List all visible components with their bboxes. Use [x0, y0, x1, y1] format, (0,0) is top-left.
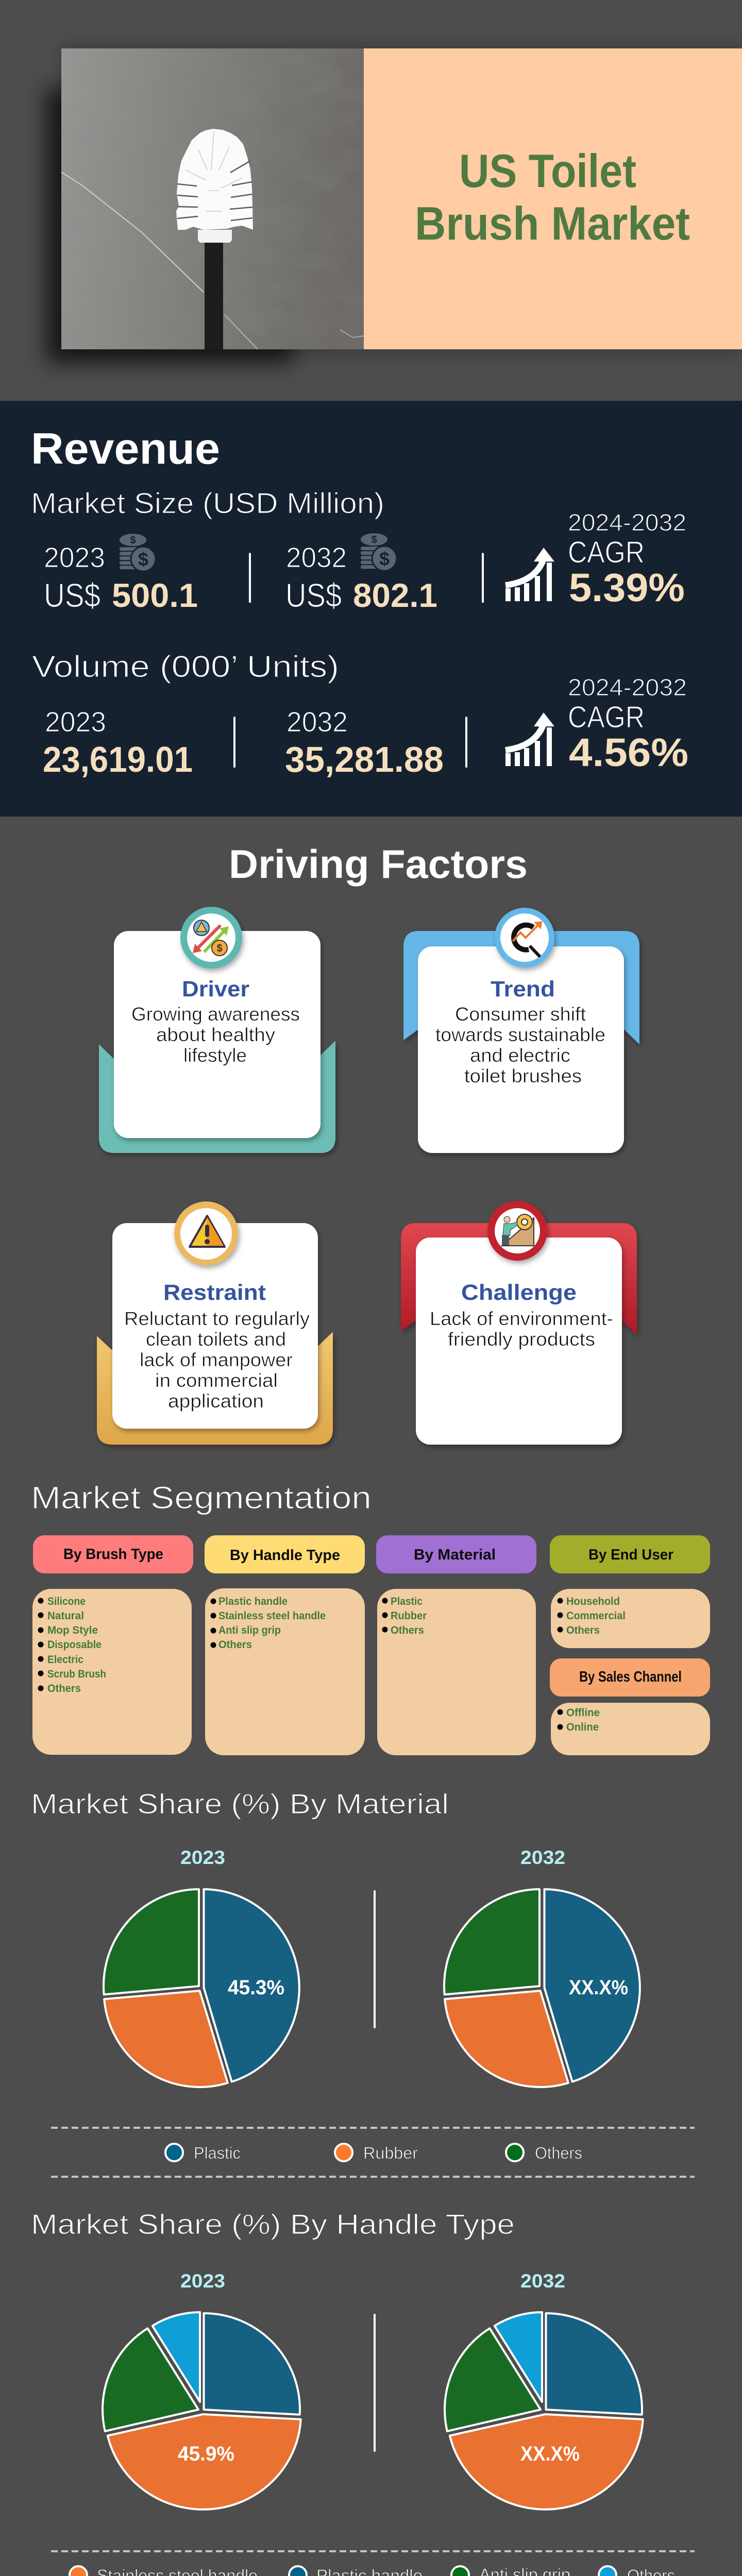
panel: driver	[99, 907, 335, 1153]
hero photo: toilet brush on stone	[61, 48, 364, 349]
list: handle types: Stainless steel handle	[218, 1610, 326, 1622]
label: challenge: Challenge	[461, 1280, 577, 1305]
stat: volume 2023: 2023	[45, 706, 106, 738]
pie: material 2032	[444, 1889, 640, 2087]
subheading: volume: Volume (000’ Units)	[32, 650, 339, 684]
list: end users: Household	[566, 1596, 620, 1607]
text: restraint description	[124, 1308, 310, 1412]
heading: driving factors: Driving Factors	[229, 841, 528, 887]
stat: volume 2032: 35,281.88	[285, 739, 444, 779]
stat: volume CAGR: 4.56%	[569, 731, 688, 775]
icon: coins 2032: $	[379, 548, 390, 569]
stat: market size 2032: US$	[285, 577, 342, 614]
stat: volume 2023: 23,619.01	[43, 739, 193, 779]
list: brush types: Others	[47, 1683, 81, 1694]
icon: growth arrow	[505, 713, 554, 766]
text: challenge description: Lack of environment-	[430, 1308, 613, 1329]
panel: revenue	[0, 401, 742, 817]
heading: market share by handle type: Market Share (%) By Handle Type	[31, 2208, 515, 2240]
list: brush types: Disposable	[47, 1639, 102, 1651]
panel: by brush type	[32, 1535, 193, 1755]
text: trend description: towards sustainable	[435, 1024, 605, 1045]
stat: market size 2023: 500.1	[112, 577, 198, 614]
text: driver description: lifestyle	[183, 1045, 247, 1066]
list: brush types: Mop Style	[47, 1624, 98, 1636]
divider	[482, 553, 484, 603]
text: challenge description	[430, 1308, 613, 1350]
label: 2032: 2032	[520, 1847, 565, 1868]
icon: trend	[495, 908, 554, 968]
label: 2032: 2032	[520, 2270, 565, 2292]
label: driver: Driver	[182, 977, 249, 1002]
title	[415, 145, 690, 250]
title: Brush Market	[415, 198, 690, 250]
panel: by end user: By End User	[588, 1547, 673, 1563]
icon: growth arrow	[505, 548, 554, 601]
stat: market size 2023: US$	[44, 577, 100, 614]
stat: market size 2023	[44, 541, 198, 614]
list: brush types: Silicone	[47, 1596, 86, 1607]
panel: by sales channel: By Sales Channel	[579, 1669, 682, 1685]
peach title panel	[364, 48, 742, 349]
label: trend: Trend	[491, 977, 555, 1002]
stat: market size 2023: 2023	[44, 541, 105, 573]
text: restraint description: Reluctant to regularly	[124, 1308, 310, 1329]
list: materials: Others	[391, 1624, 424, 1636]
icon: coins 2023: $	[138, 549, 148, 570]
panel: by sales channel	[550, 1658, 710, 1755]
heading: market segmentation: Market Segmentation	[31, 1480, 372, 1515]
chart: handle type pies	[103, 2270, 643, 2510]
list: end users	[558, 1596, 626, 1636]
list: end users: Commercial	[566, 1610, 626, 1622]
list: brush types: Scrub Brush	[47, 1668, 106, 1680]
icon: coins 2032	[361, 533, 397, 571]
text: trend description: and electric	[470, 1045, 570, 1066]
pie: material 2023	[104, 1889, 299, 2087]
text: restraint description: application	[168, 1391, 264, 1412]
list: sales channels: Offline	[566, 1707, 600, 1719]
list: sales channels	[558, 1707, 600, 1733]
stat: market size 2032: 2032	[286, 541, 347, 573]
icon: driver	[180, 907, 242, 969]
pie: handle type 2032	[445, 2312, 643, 2510]
list: brush types: Natural	[47, 1610, 84, 1622]
text: trend description: Consumer shift	[455, 1004, 586, 1025]
divider	[374, 2314, 376, 2452]
stat: value CAGR: 2024-2032	[568, 509, 686, 536]
text: trend description	[435, 1004, 605, 1087]
text: restraint description: lack of manpower	[140, 1349, 293, 1370]
stat: value CAGR	[568, 509, 686, 610]
label: restraint: Restraint	[163, 1280, 266, 1305]
stat: volume 2023	[43, 706, 193, 779]
list: brush types	[38, 1596, 106, 1694]
panel: by material	[376, 1535, 536, 1755]
stat: volume CAGR	[568, 674, 688, 775]
list: end users: Others	[566, 1624, 600, 1636]
text: trend description: toilet brushes	[464, 1065, 582, 1087]
list: handle types	[210, 1596, 326, 1651]
text: driver description	[131, 1004, 300, 1066]
value: XX.X%: XX.X%	[569, 1976, 628, 1999]
icon: coins 2023	[120, 534, 156, 571]
list: handle types: Anti slip grip	[218, 1624, 281, 1636]
stat: volume 2032	[285, 706, 444, 779]
list: materials: Plastic	[391, 1596, 423, 1607]
subheading: market size: Market Size (USD Million)	[31, 487, 384, 520]
panel: by brush type: By Brush Type	[63, 1546, 163, 1563]
title: US Toilet	[459, 145, 636, 197]
text: restraint description: in commercial	[155, 1370, 278, 1391]
icon: driver: $	[216, 943, 223, 954]
stat: market size 2032: 802.1	[353, 577, 437, 614]
chart: material pies	[104, 1847, 640, 2087]
icon: coins 2032: $	[371, 534, 377, 546]
panel: by handle type	[205, 1535, 365, 1755]
legend: material: Rubber	[363, 2144, 418, 2162]
legend: material: Others	[535, 2144, 582, 2162]
list: handle types: Plastic handle	[218, 1596, 288, 1607]
text: driver description: Growing awareness	[131, 1004, 300, 1025]
text: challenge description: friendly products	[448, 1329, 595, 1350]
value: 45.3%: 45.3%	[228, 1976, 284, 1999]
list: materials	[382, 1596, 427, 1636]
stat: market size 2032	[285, 541, 437, 614]
divider	[233, 717, 235, 768]
legend: material: Plastic	[194, 2144, 241, 2162]
heading: market share by material: Market Share (%) By Material	[31, 1788, 449, 1820]
stat: volume 2032: 2032	[286, 706, 348, 738]
hero banner	[45, 45, 742, 363]
panel: restraint	[97, 1201, 333, 1445]
text: restraint description: clean toilets and	[146, 1329, 286, 1350]
panel: by handle type: By Handle Type	[230, 1547, 340, 1564]
text: driver description: about healthy	[156, 1024, 276, 1045]
divider	[374, 1890, 376, 2028]
stat: volume CAGR: CAGR	[568, 700, 645, 734]
list: handle types: Others	[218, 1639, 252, 1651]
label: 2023: 2023	[180, 1847, 225, 1868]
icon: coins 2023: $	[130, 535, 136, 546]
pie: handle type 2023	[103, 2312, 301, 2510]
divider	[465, 717, 467, 768]
value: 45.9%: 45.9%	[178, 2443, 234, 2465]
list: materials: Rubber	[391, 1610, 427, 1622]
panel: by material: By Material	[414, 1547, 496, 1563]
label: 2023: 2023	[180, 2270, 225, 2292]
panel: challenge	[401, 1201, 637, 1445]
list: sales channels: Online	[566, 1721, 599, 1733]
value: XX.X%: XX.X%	[520, 2443, 580, 2465]
divider	[249, 553, 251, 603]
panel: trend	[403, 908, 639, 1153]
list: brush types: Electric	[47, 1654, 83, 1666]
stat: value CAGR: 5.39%	[569, 566, 685, 610]
stat: volume CAGR: 2024-2032	[568, 674, 687, 701]
heading: revenue: Revenue	[31, 425, 220, 473]
legend: material	[165, 2144, 582, 2162]
stat: value CAGR: CAGR	[568, 535, 645, 569]
panel: by end user	[550, 1535, 710, 1648]
legend: handle type	[70, 2565, 675, 2576]
icon: challenge	[487, 1201, 547, 1261]
icon: restraint	[174, 1201, 238, 1265]
